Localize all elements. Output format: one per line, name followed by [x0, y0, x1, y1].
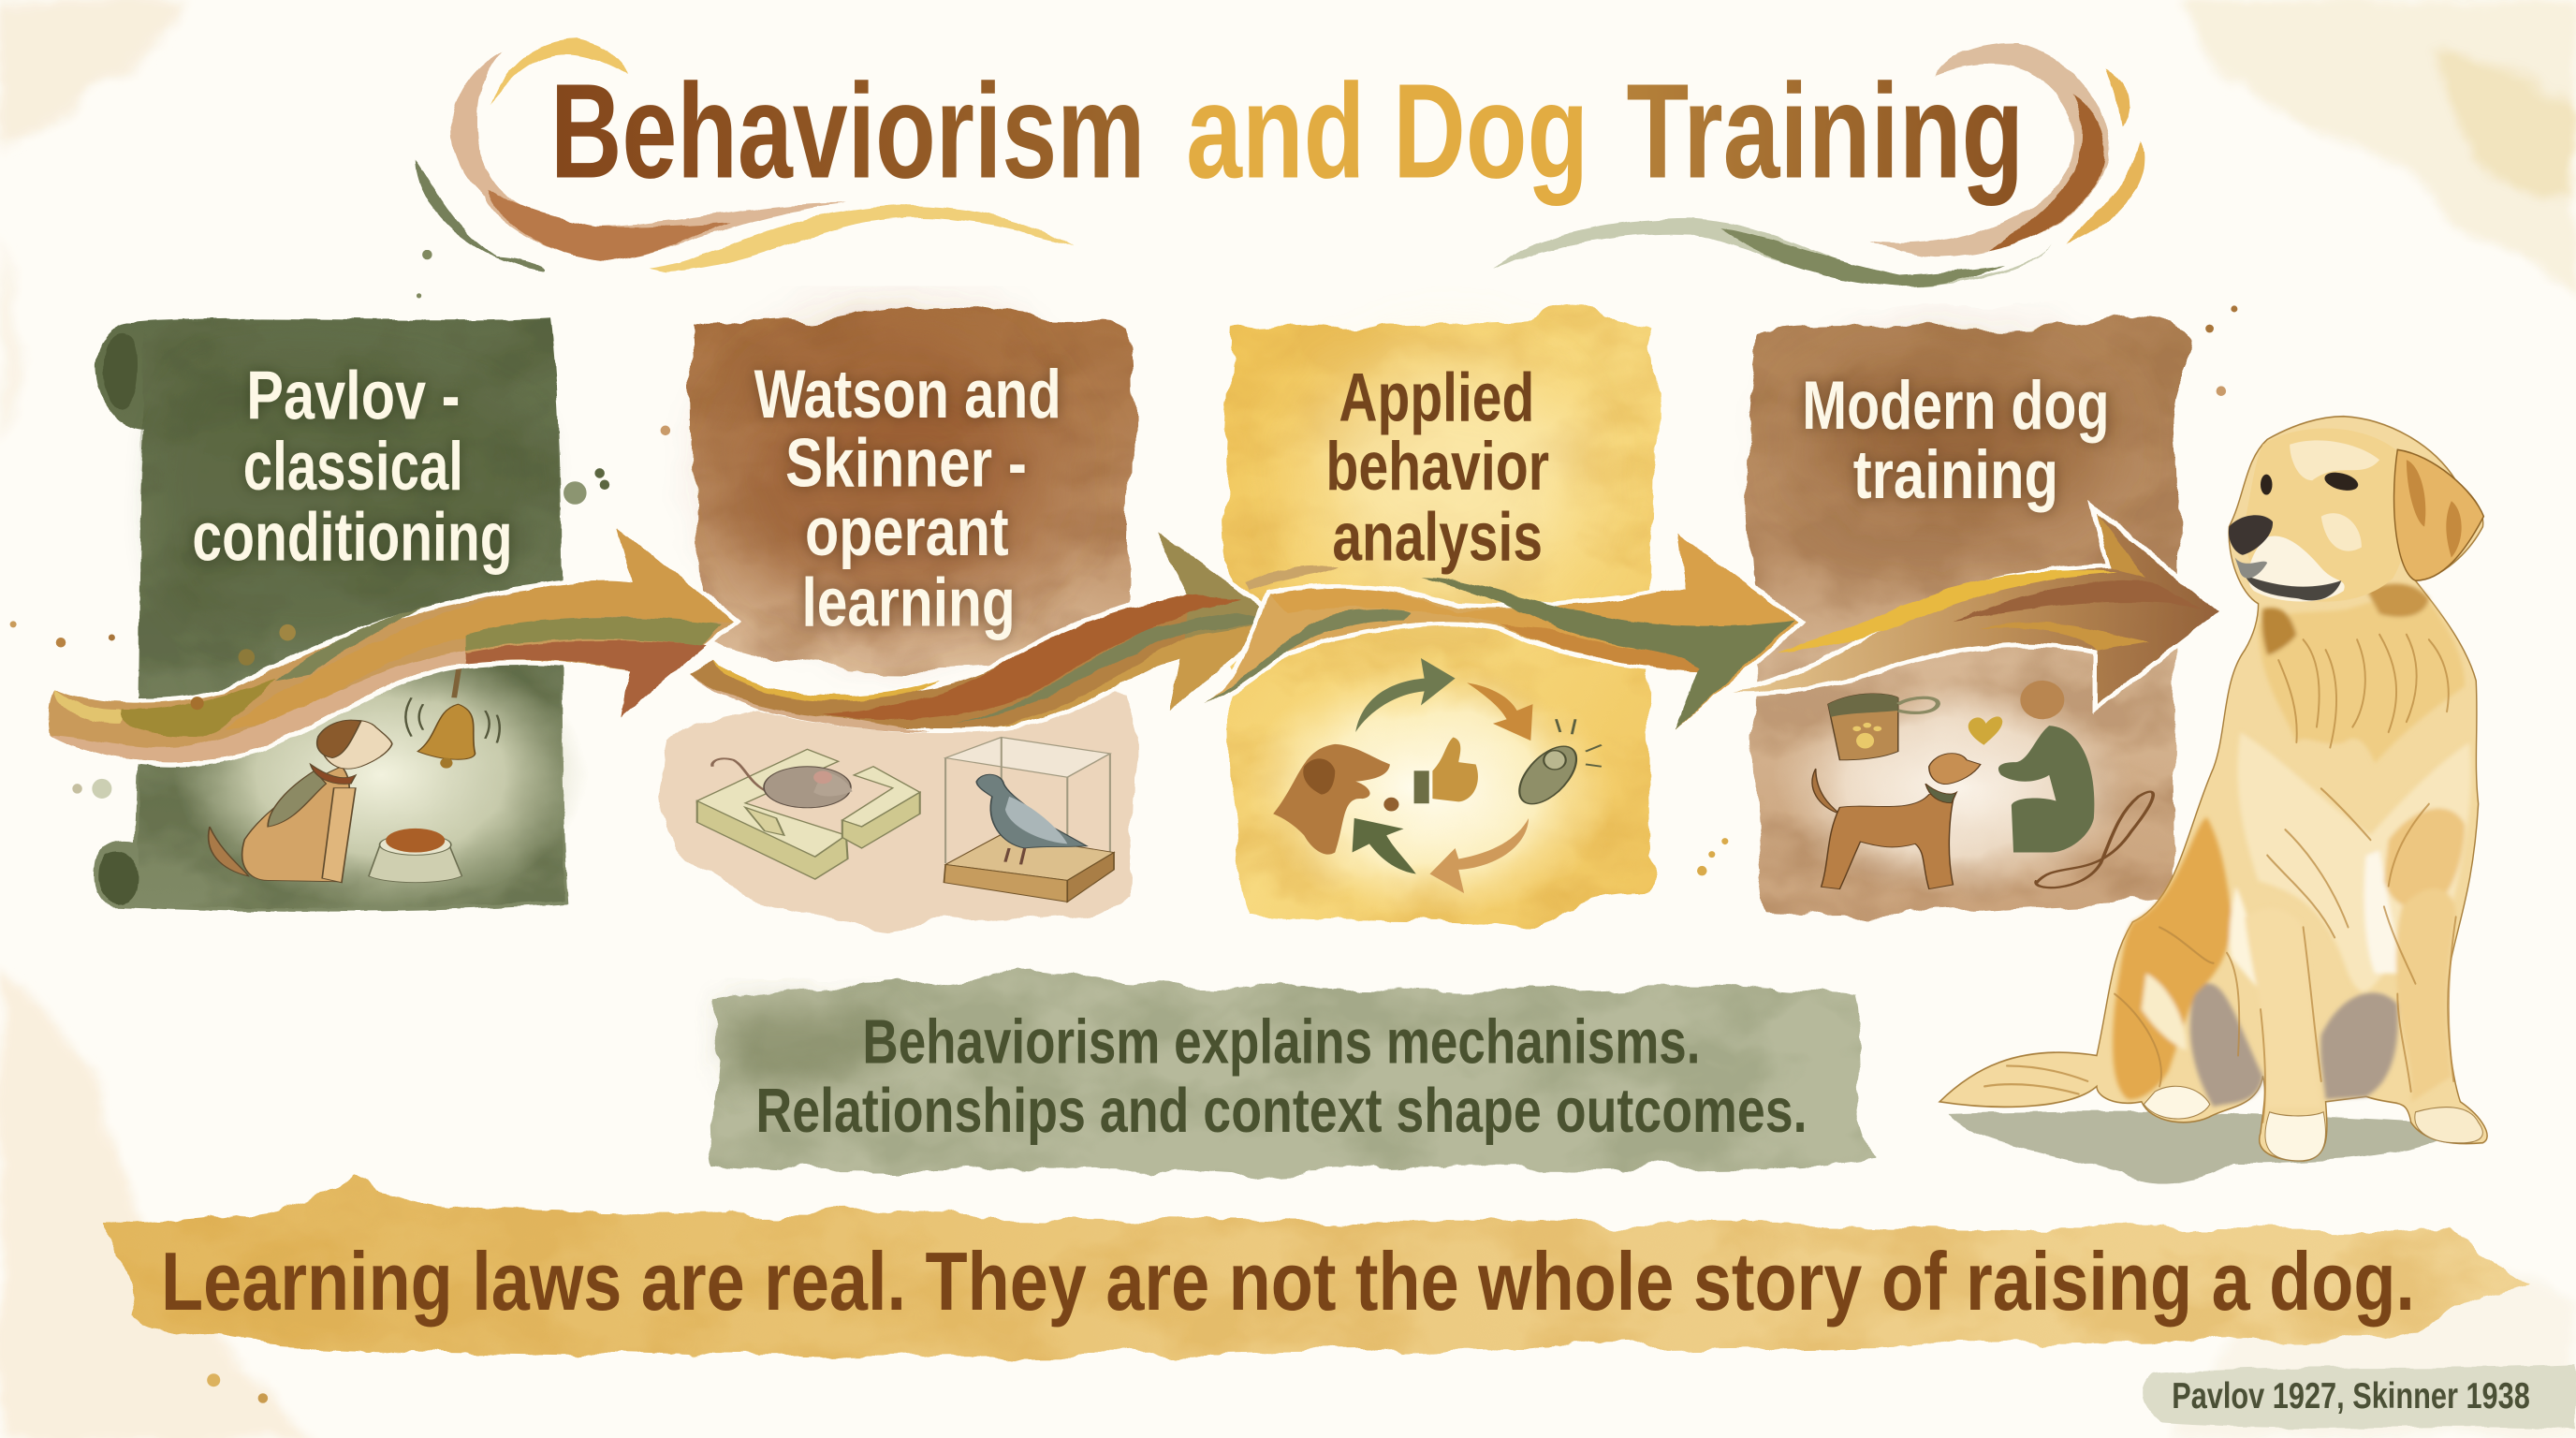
panel heading: conditioning	[192, 497, 513, 575]
dog silhouette	[1939, 417, 2487, 1161]
panel heading: learning	[802, 564, 1016, 641]
icon: food bowl	[369, 829, 461, 883]
icon: sitting dog	[209, 720, 392, 883]
icon: trainer	[1998, 681, 2094, 853]
arrow band: brown main	[823, 594, 1242, 720]
dog head fill	[2244, 428, 2409, 602]
banner brush stroke	[98, 1180, 2530, 1357]
arrow band: gold	[993, 621, 1280, 726]
dog ground shadow	[1949, 1111, 2456, 1184]
paint splatter dots	[10, 250, 2237, 1403]
title	[550, 57, 2024, 207]
arrow head and ochre band	[226, 528, 734, 727]
panel heading: Pavlov -	[246, 357, 460, 434]
icon: pigeon in cage	[944, 738, 1114, 902]
arrow band: brown lower	[466, 640, 707, 717]
panel 1: Pavlov scroll	[95, 317, 588, 912]
takeaway banner	[98, 1180, 2530, 1357]
callout background	[711, 969, 1876, 1177]
arrow band: yellow	[1778, 571, 2118, 653]
tag background	[2142, 1364, 2576, 1430]
panel heading: Modern dog	[1802, 366, 2110, 444]
title decoration swooshes	[416, 39, 2144, 286]
swoosh: left yellow arc	[491, 39, 628, 106]
arrow: cycle top left	[1355, 658, 1456, 732]
icon: dog head	[1273, 744, 1398, 855]
dog paws	[2144, 1086, 2482, 1161]
title: and Dog	[1186, 57, 1588, 207]
arrow 2: Watson to Applied	[691, 533, 1280, 732]
callout: behaviorism explains mechanisms	[711, 969, 1876, 1177]
arrow band: tan	[691, 674, 931, 732]
arrow: cycle bottom right	[1429, 818, 1529, 893]
arrow band: ochre tail	[120, 679, 275, 737]
dog soft coat patches	[2113, 583, 2471, 1107]
swoosh: left tan and brown arc	[452, 50, 846, 261]
arrow band: olive middle	[466, 617, 722, 651]
arrow band: yellow tail	[54, 689, 124, 724]
panel heading	[1325, 358, 1549, 575]
cage	[945, 738, 1110, 898]
arrow head	[1157, 533, 1280, 711]
arrow 4: Modern to dog	[1734, 513, 2217, 704]
arrow accent	[1246, 566, 1339, 590]
icon: bell	[405, 653, 500, 769]
title: Training	[1627, 57, 2024, 207]
panel heading: classical	[243, 427, 463, 505]
panel heading: Applied	[1339, 358, 1534, 435]
arrow: cycle bottom left	[1353, 818, 1416, 874]
panel 4: Modern dog training	[1746, 315, 2195, 916]
icon: heart	[1969, 716, 2002, 745]
panel shape	[659, 304, 1135, 930]
arrow band: gold notch	[1981, 623, 2149, 651]
cage base	[944, 834, 1114, 902]
panel heading: analysis	[1332, 497, 1543, 575]
panel shape	[1746, 315, 2195, 916]
arrow halo and base	[49, 528, 734, 761]
swoosh: left olive	[416, 159, 545, 271]
callout text: Behaviorism explains mechanisms.	[862, 1008, 1701, 1078]
callout: behaviorism explains mechanisms: Relationships and context shape outcomes.	[755, 1077, 1808, 1146]
swoosh: left yellow wave	[649, 206, 1074, 272]
arrow band: yellow	[714, 661, 939, 701]
icon: leash	[2036, 792, 2153, 888]
panel shape	[95, 317, 588, 912]
panel heading: behavior	[1325, 427, 1549, 505]
icon: clicker	[1508, 719, 1602, 809]
dog ear	[2394, 449, 2483, 580]
icon: modern training scene	[1812, 681, 2153, 889]
maze	[697, 749, 920, 879]
dog muzzle	[2248, 536, 2345, 601]
arrow 1: Pavlov to Watson	[49, 528, 734, 761]
icon: Pavlov dog, bell and food bowl	[209, 653, 500, 883]
rat	[712, 758, 853, 808]
swoosh: right yellow strokes	[2066, 68, 2144, 245]
panel heading: Skinner -	[785, 423, 1027, 501]
swoosh: right tan and brown arc	[1871, 43, 2110, 257]
panel 3: Applied behavior analysis	[1224, 299, 1662, 929]
swoosh: right olive wave	[1493, 218, 2052, 286]
panel heading	[1802, 366, 2110, 513]
icon: treat pouch	[1828, 694, 1938, 760]
arrow: cycle top right	[1467, 682, 1533, 741]
panel heading	[754, 355, 1061, 641]
dog fur strokes	[1984, 635, 2456, 1123]
arrow 3: Applied to Modern	[1205, 535, 1798, 730]
icon: thumbs up	[1414, 738, 1478, 803]
arrow band: olive	[955, 611, 1280, 724]
arrow halo and base	[691, 533, 1280, 728]
title: Behaviorism	[550, 57, 1145, 207]
panel heading	[192, 357, 513, 575]
arrow head: gold top	[2098, 513, 2145, 578]
arrow band: olive streak	[275, 606, 427, 681]
dog nose and mouth	[2229, 469, 2360, 600]
panel heading: training	[1853, 435, 2058, 513]
panel 2: Watson and Skinner	[659, 304, 1135, 930]
pigeon	[976, 774, 1087, 864]
arrow halo and body	[1734, 513, 2217, 704]
big golden retriever	[1939, 417, 2487, 1184]
dog forehead highlight	[2290, 440, 2379, 551]
arrow band: olive lower	[1205, 609, 1411, 704]
icon: rat in maze	[697, 749, 920, 879]
source citation tag	[2142, 1364, 2576, 1430]
arrow band: olive upper	[1421, 578, 1795, 730]
arrow halo and base	[1205, 535, 1798, 730]
icon: reinforcement cycle	[1273, 658, 1602, 893]
panel shape	[1224, 299, 1662, 929]
arrow band: dark streak	[1953, 581, 2201, 621]
arrow band: tan tail	[51, 651, 466, 761]
arrow band: orange lower	[1500, 624, 1705, 672]
panel heading: operant	[805, 492, 1009, 570]
arrow body: orange	[1270, 535, 1798, 730]
icon: standing dog	[1812, 754, 1981, 889]
panel heading: Watson and	[754, 355, 1061, 433]
